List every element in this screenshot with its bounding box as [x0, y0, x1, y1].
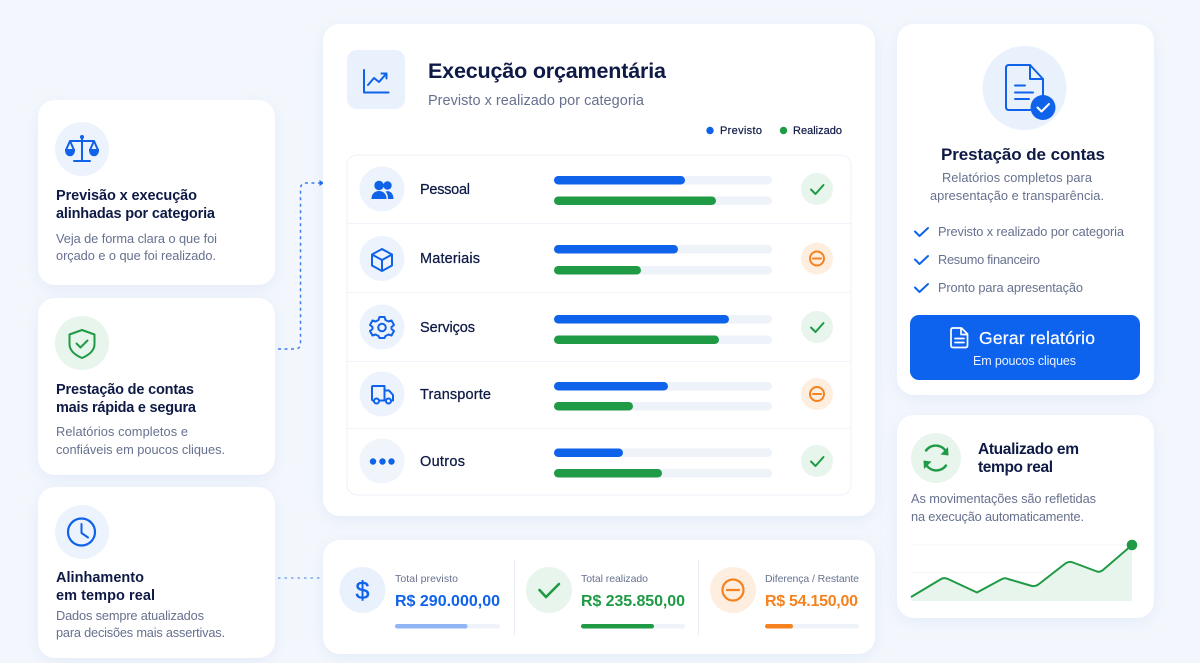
text block: para decisões mais assertivas. — [56, 625, 225, 640]
text block: Relatórios completos e — [56, 424, 188, 439]
status: ok — [801, 445, 833, 477]
text block: Veja de forma clara o que foi — [56, 231, 217, 246]
checklist: Previsto x realizado por categoria — [938, 224, 1125, 239]
line chart — [911, 540, 1137, 601]
panel: prestação de contas — [897, 24, 1154, 395]
heading — [56, 188, 216, 222]
heading: Prestação de contas — [56, 382, 194, 398]
total previsto: Total previsto — [395, 573, 458, 585]
heading: alinhadas por categoria — [56, 206, 216, 222]
label: Transporte — [420, 387, 491, 403]
arrow: connector to table — [278, 180, 324, 349]
total realizado: Total realizado — [581, 573, 648, 585]
heading: Previsão x execução — [56, 188, 197, 204]
heading: Atualizado em — [978, 441, 1079, 458]
bars — [554, 448, 772, 478]
text block — [911, 491, 1096, 524]
total previsto: R$ 290.000,00 — [395, 593, 500, 610]
diferença / restante: R$ 54.150,00 — [765, 593, 858, 610]
label: Outros — [420, 454, 465, 470]
arrow: connector to totals — [278, 577, 322, 579]
panel: totals — [323, 540, 875, 654]
heading: em tempo real — [56, 588, 155, 604]
icon: dots — [360, 438, 404, 484]
status: attention — [801, 242, 833, 274]
heading: Prestação de contas — [941, 145, 1105, 164]
text block: orçado e o que foi realizado. — [56, 248, 216, 263]
legend: Realizado — [793, 125, 842, 137]
text block: Relatórios completos para — [942, 170, 1093, 185]
heading — [56, 382, 197, 416]
text block — [56, 231, 217, 263]
legend: Previsto — [720, 125, 762, 137]
icon: document — [951, 328, 968, 348]
icon: shield — [55, 316, 109, 370]
heading: mais rápida e segura — [56, 400, 197, 416]
icon: truck — [360, 372, 404, 416]
legend — [706, 125, 842, 137]
row: Transporte — [360, 372, 833, 416]
text block: confiáveis em poucos cliques. — [56, 442, 225, 457]
bars — [554, 382, 772, 410]
diferença / restante: Diferença / Restante — [765, 573, 859, 585]
row: Materiais — [360, 236, 833, 281]
icon: box — [360, 236, 404, 281]
checklist: Pronto para apresentação — [938, 280, 1083, 295]
title: Execução orçamentária — [428, 59, 667, 83]
button: gerar relatório: Em poucos cliques — [973, 354, 1076, 368]
panel: prestação de contas mais rápida — [38, 298, 275, 475]
text block — [930, 170, 1104, 203]
bars — [554, 176, 772, 205]
total realizado: R$ 235.850,00 — [581, 593, 685, 610]
status: ok — [801, 173, 833, 205]
diferença / restante — [710, 567, 859, 628]
heading: Alinhamento — [56, 570, 144, 586]
heading — [978, 441, 1079, 476]
icon: gear — [360, 304, 404, 350]
icon: document with check — [982, 46, 1066, 130]
text block: na execução automaticamente. — [911, 509, 1084, 524]
button: gerar relatório: Gerar relatório — [979, 328, 1095, 348]
text block: Dados sempre atualizados — [56, 608, 204, 623]
button: gerar relatório — [910, 315, 1140, 380]
status: attention — [801, 378, 833, 410]
panel: atualizado em tempo real — [897, 415, 1154, 618]
subtitle: Previsto x realizado por categoria — [428, 93, 645, 109]
row: Outros — [360, 438, 833, 484]
checklist — [915, 224, 1125, 295]
text block: apresentação e transparência. — [930, 188, 1104, 203]
total previsto — [340, 567, 500, 628]
panel: previsão x execução — [38, 100, 275, 285]
bars — [554, 315, 772, 344]
row: Serviços — [360, 304, 833, 350]
text block — [56, 424, 225, 457]
icon: line chart — [347, 50, 405, 109]
checklist: Resumo financeiro — [938, 252, 1040, 267]
icon: refresh — [911, 433, 961, 483]
icon: clock — [55, 505, 109, 559]
table frame — [347, 155, 851, 495]
panel: execução orçamentária — [323, 24, 875, 516]
label: Pessoal — [420, 182, 470, 198]
total realizado — [526, 567, 685, 628]
heading — [56, 570, 155, 604]
row: Pessoal — [360, 166, 833, 212]
text block — [56, 608, 225, 640]
total previsto: $ — [356, 577, 370, 605]
bars — [554, 245, 772, 274]
icon: people — [360, 166, 404, 212]
label: Materiais — [420, 251, 480, 267]
icon: scales — [55, 122, 109, 176]
text block: As movimentações são refletidas — [911, 491, 1096, 506]
label: Serviços — [420, 320, 475, 336]
panel: alinhamento em tempo real — [38, 487, 275, 658]
status: ok — [801, 311, 833, 343]
heading: tempo real — [978, 459, 1053, 476]
